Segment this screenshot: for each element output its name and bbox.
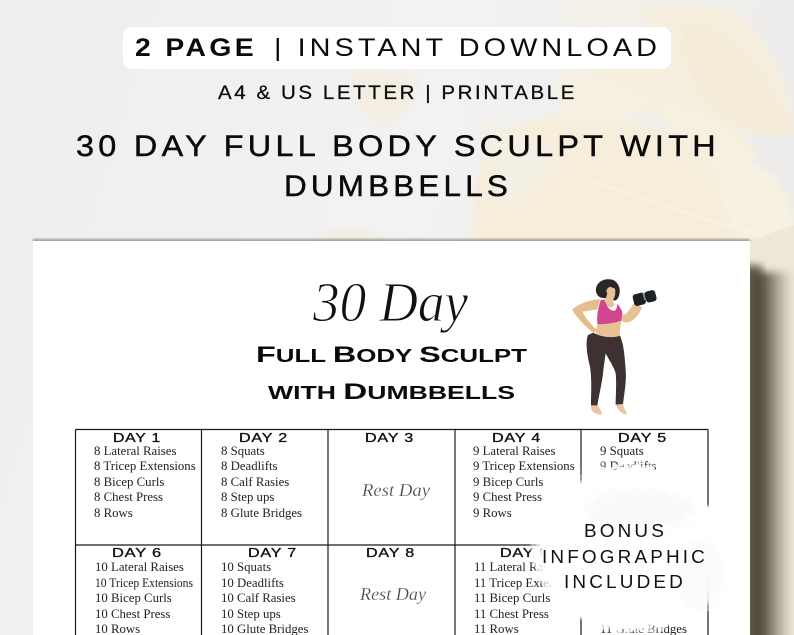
sheet title: small caps: F ULL B ODY S CULPT (256, 342, 527, 367)
cell: day 9 (474, 546, 582, 635)
cell: day 6 (95, 546, 193, 635)
cell: day 7: 10 Step ups (221, 607, 281, 621)
cell: day 6: DAY 6 (112, 546, 162, 560)
cell: day 7: DAY 7 (248, 546, 297, 560)
cell: day 4: 9 Bicep Curls (473, 475, 543, 489)
main title: DUMBBELLS (284, 170, 512, 203)
cell: day 4: 9 Lateral Raises (473, 444, 555, 458)
cell: day 2: 8 Calf Rasies (221, 475, 289, 489)
main title: 30 DAY FULL BODY SCULPT WITH (76, 130, 720, 163)
cell: day 6: 10 Bicep Curls (95, 591, 172, 605)
cell: day 3 (361, 431, 430, 500)
cell: day 6: 10 Lateral Raises (95, 560, 184, 574)
cell: day 4 (473, 431, 575, 520)
cell: day 1: 8 Chest Press (94, 490, 163, 504)
cell: day 9: 11 Bicep Curls (474, 591, 550, 605)
icon: woman lifting dumbbell (572, 279, 657, 415)
cell: day 3: Rest Day (361, 480, 430, 500)
bonus badge text: INFOGRAPHIC (542, 547, 708, 567)
cell: day 2: 8 Glute Bridges (221, 506, 302, 520)
cell: day 9: DAY 9 (500, 546, 549, 560)
cell: day 2: 8 Step ups (221, 490, 274, 504)
cell: day 7: 10 Squats (221, 560, 271, 574)
cell: day 6: 10 Tricep Extensions (95, 576, 193, 590)
cell: day 8: DAY 8 (366, 546, 415, 560)
bonus badge: white brush blob (532, 464, 732, 632)
cell: day 9: 11 Chest Press (474, 607, 549, 621)
workout calendar grid (76, 430, 708, 635)
cell: day 2: 8 Deadlifts (221, 459, 278, 473)
cell: day 9: 11 Tricep Extensions (474, 576, 582, 590)
cell: day 5: 9 Squats (600, 444, 644, 458)
cell: day 1: 8 Tricep Extensions (94, 459, 196, 473)
cell: day 5: DAY 5 (618, 431, 667, 445)
cell: day 4: 9 Tricep Extensions (473, 459, 575, 473)
cell: day 2: 8 Squats (221, 444, 265, 458)
sheet title: small caps: WITH D UMBBELLS (268, 379, 515, 404)
banner text: 2 page: 2 PAGE (135, 34, 257, 62)
cell: day 1: 8 Bicep Curls (94, 475, 164, 489)
main title (76, 130, 720, 203)
subheading: formats: A4 & US LETTER | PRINTABLE (218, 83, 577, 104)
cell: day 7: 10 Calf Rasies (221, 591, 296, 605)
paper drop shadow (33, 239, 794, 635)
cell: day 1 (94, 431, 196, 520)
cell: day 5: 9 Deadlifts (600, 459, 657, 473)
background: cream leaves (315, 0, 794, 635)
banner pill (123, 27, 671, 69)
cell: day 1: 8 Rows (94, 506, 133, 520)
bonus badge text (542, 521, 708, 592)
cell: day 9: 11 Lateral Raises (474, 560, 562, 574)
cell: day 6: 10 Chest Press (95, 607, 170, 621)
sheet title: small caps (256, 342, 527, 404)
bonus badge text: BONUS (584, 521, 667, 541)
cell: day 8: Rest Day (359, 584, 426, 604)
cell: day 4: 9 Chest Press (473, 490, 542, 504)
cell: day 8 (359, 546, 426, 604)
cell: day 3: DAY 3 (365, 431, 414, 445)
cell: day 2: DAY 2 (239, 431, 288, 445)
banner text: instant download: | INSTANT DOWNLOAD (274, 34, 661, 62)
cell: day 7: 10 Deadlifts (221, 576, 284, 590)
cell: day 7 (221, 546, 308, 635)
cell: day 2 (221, 431, 302, 520)
cell: day 5 (600, 431, 667, 473)
cell: day 1: DAY 1 (113, 431, 161, 445)
printable sheet preview (33, 241, 750, 635)
bonus badge text: INCLUDED (564, 572, 686, 592)
sheet title: script: 30 Day (312, 272, 468, 334)
cell: day 1: 8 Lateral Raises (94, 444, 176, 458)
cell: day 4: 9 Rows (473, 506, 512, 520)
cell: day 4: DAY 4 (492, 431, 541, 445)
